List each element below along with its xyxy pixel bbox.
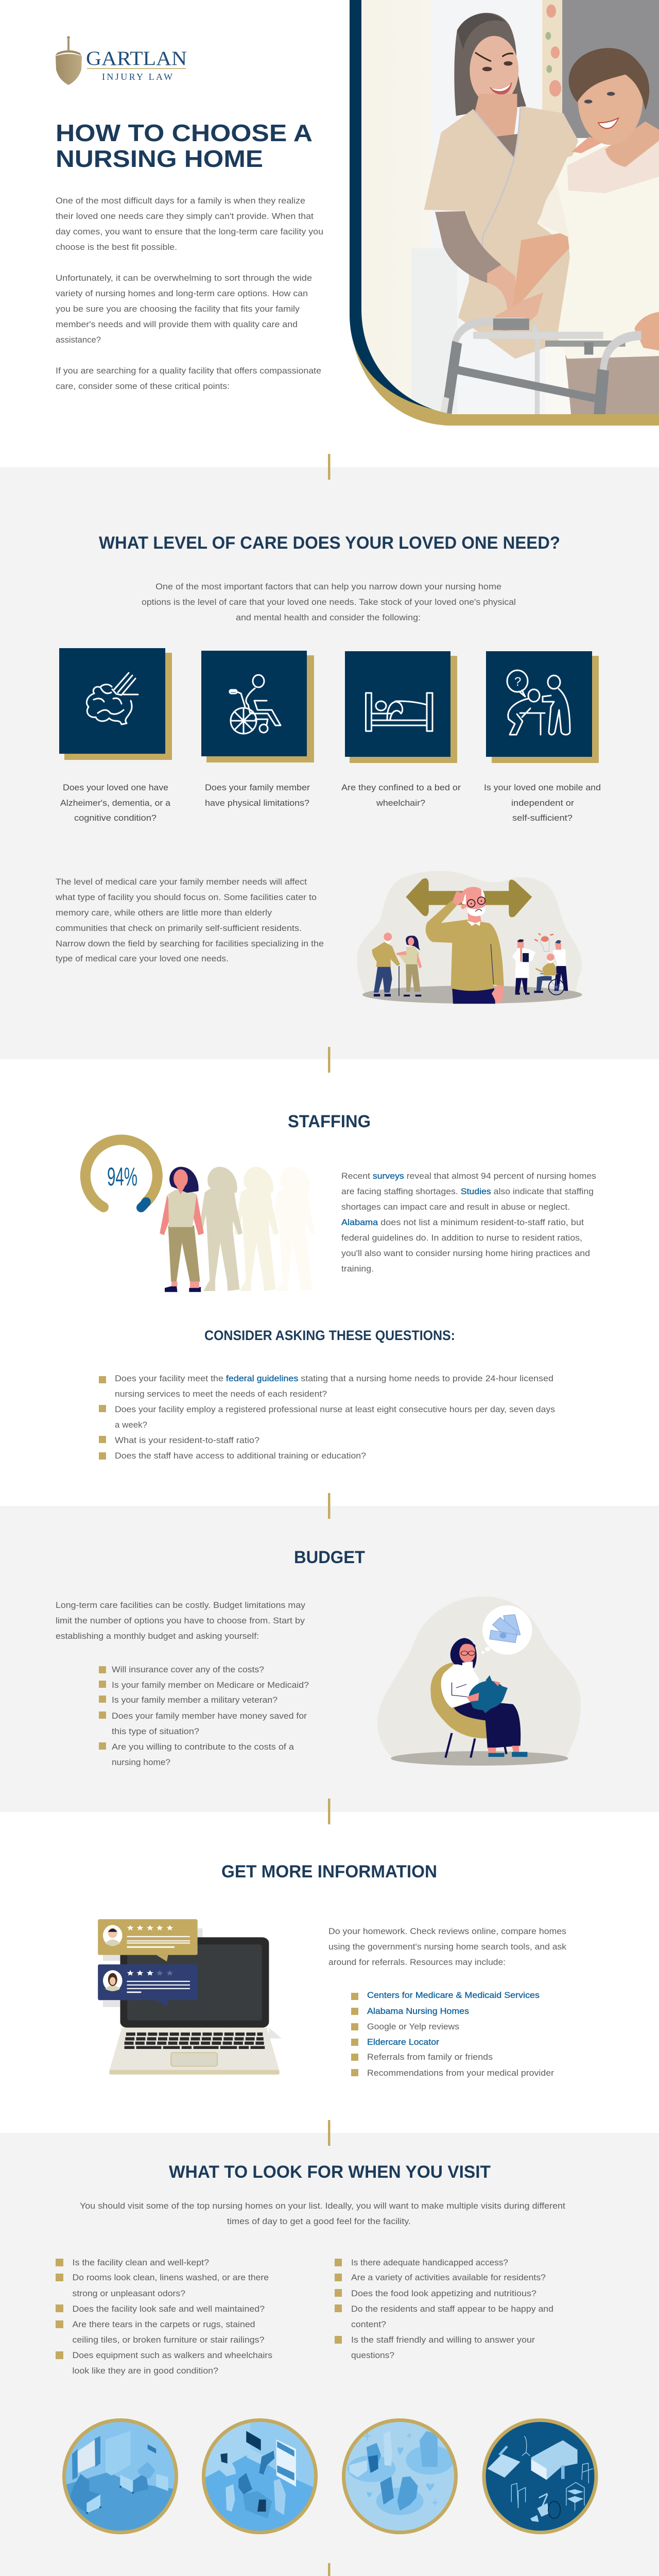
panel: hero introduction xyxy=(55,0,659,426)
walker xyxy=(455,321,525,342)
heading: get more information: GET MORE INFORMATION xyxy=(221,1862,437,1882)
icon card: bed xyxy=(345,651,457,763)
text: care questions: self-sufficient? xyxy=(512,813,573,823)
text: level of care intro: One of the most important factors that can help you narrow down your nursing home xyxy=(155,582,501,591)
list: visit checklist right: content? xyxy=(351,2320,386,2329)
text: care questions xyxy=(60,783,601,823)
list: budget questions: Does your family member have money saved for xyxy=(112,1711,307,1721)
list: visit checklist left xyxy=(56,2258,272,2376)
list: visit checklist left: Does the facility look safe and well maintained? xyxy=(72,2304,265,2314)
text: care questions: have physical limitations? xyxy=(205,798,309,808)
list: resources: Recommendations from your medical provider xyxy=(367,2069,554,2078)
doctor and patient xyxy=(517,939,524,948)
text: care questions: Is your loved one mobile and xyxy=(484,783,601,792)
list: visit checklist left: strong or unpleasant odors? xyxy=(72,2289,185,2298)
text: staffing paragraph: you'll also want to consider nursing home hiring practices and xyxy=(341,1249,590,1258)
list: resources xyxy=(351,1991,554,2078)
heading: what level of care: WHAT LEVEL OF CARE DOES YOUR LOVED ONE NEED? xyxy=(99,533,560,553)
list: staffing questions: nursing services to meet the needs of each resident? xyxy=(115,1389,327,1399)
small couple xyxy=(374,967,392,993)
list: visit checklist right: Is there adequate handicapped access? xyxy=(351,2258,508,2267)
panel: budget xyxy=(0,1493,659,1812)
text: care questions: Does your family member xyxy=(205,783,310,792)
text: visit intro xyxy=(80,2201,565,2226)
text: intro paragraphs: Unfortunately, it can be overwhelming to sort through the wide xyxy=(56,274,312,283)
list: visit checklist right: Is the staff friendly and willing to answer your xyxy=(351,2335,535,2345)
text: intro paragraphs: day comes, you want to ensure that the long-term care facility you xyxy=(56,227,323,236)
text: intro paragraphs: choose is the best fit possible. xyxy=(56,243,177,252)
text: care questions: Does your loved one have xyxy=(63,783,168,792)
panel: what to look for when you visit xyxy=(0,2120,659,2576)
text: level of medical care: communities that check on primarily self-sufficient residents. xyxy=(56,924,302,933)
list: visit checklist right: Are a variety of activities available for residents? xyxy=(351,2273,546,2282)
list: budget questions: nursing home? xyxy=(112,1758,170,1767)
logo: Gartlan Injury Law: INJURY LAW xyxy=(102,72,172,82)
list: budget questions: Are you willing to contribute to the costs of a xyxy=(112,1742,294,1752)
text: staffing paragraph: training. xyxy=(341,1264,374,1274)
text: care questions: Alzheimer's, dementia, or a xyxy=(60,798,171,808)
list: visit checklist left: ceiling tiles, or broken furniture or stair railings? xyxy=(72,2335,265,2345)
text: level of medical care xyxy=(55,877,324,963)
text: homework paragraph: around for referrals. Resources may include: xyxy=(328,1958,506,1967)
list: visit checklist left: Is the facility clean and well-kept? xyxy=(72,2258,209,2267)
text: intro paragraphs: variety of nursing homes and long-term care options. How can xyxy=(56,289,308,298)
logo: Gartlan Injury Law: GARTLAN xyxy=(86,47,187,70)
nurse xyxy=(454,13,526,116)
text: homework paragraph: using the government's nursing home search tools, and ask xyxy=(328,1942,567,1952)
list: visit checklist right: Do the residents and staff appear to be happy and xyxy=(351,2304,553,2314)
list: staffing questions: Does your facility employ a registered professional nurse at least eight consecutive hours per day, seven days xyxy=(115,1405,555,1414)
list: budget questions: Is your family member a military veteran? xyxy=(112,1696,278,1705)
list: resources: Centers for Medicare & Medicaid Services xyxy=(367,1991,540,2000)
illustration: staff shortage figures xyxy=(160,1167,315,1292)
list: visit checklist left: look like they are in good condition? xyxy=(72,2366,218,2376)
heading: budget: BUDGET xyxy=(294,1548,365,1567)
icon card: wheelchair xyxy=(201,651,314,762)
big man xyxy=(452,988,495,1004)
hero frame: gold and navy curve xyxy=(350,0,659,426)
illustration: confused elderly man with arrows xyxy=(357,871,582,1004)
text: care questions: wheelchair? xyxy=(376,798,425,808)
text: homework paragraph xyxy=(328,1927,567,1967)
text: intro paragraphs: If you are searching for a quality facility that offers compassionate xyxy=(56,366,321,376)
text: staffing paragraph: shortages can impact care and result in abuse or neglect. xyxy=(341,1202,570,1212)
text: level of medical care: The level of medical care your family member needs will affect xyxy=(56,877,307,887)
illustration: common room xyxy=(201,2416,319,2537)
photo: nurse helping elderly woman with walker xyxy=(361,0,659,417)
text: intro paragraphs xyxy=(56,196,323,391)
list: resources: Google or Yelp reviews xyxy=(367,2022,459,2031)
list: resources: Eldercare Locator xyxy=(367,2038,440,2047)
illustration: laptop with reviews xyxy=(98,1919,282,2075)
illustration: caregivers and residents xyxy=(340,2416,461,2537)
list: budget questions: Will insurance cover any of the costs? xyxy=(112,1665,264,1674)
text: staffing paragraph: federal guidelines do. In addition to nurse to resident ratios, xyxy=(341,1233,582,1243)
text: intro paragraphs: member's needs and will provide them with quality care and xyxy=(56,320,298,329)
text: level of medical care: type of medical care your loved one needs. xyxy=(56,954,229,963)
text: intro paragraphs: their loved one needs care they simply can't provide. When that xyxy=(56,212,314,221)
text: homework paragraph: Do your homework. Check reviews online, compare homes xyxy=(328,1927,566,1936)
icon card: person with question xyxy=(486,651,599,763)
list: staffing questions xyxy=(99,1374,555,1461)
chart: 94 percent ring xyxy=(85,1140,158,1208)
text: level of care intro: and mental health and consider the following: xyxy=(236,613,421,622)
heading: how to choose a nursing home: HOW TO CHOOSE A xyxy=(56,120,313,146)
illustration: woman with piggy bank xyxy=(377,1597,581,1766)
text: budget paragraph xyxy=(56,1601,306,1641)
list: resources: Alabama Nursing Homes xyxy=(367,2007,469,2016)
list: visit checklist right: Does the food look appetizing and nutritious? xyxy=(351,2289,536,2298)
list: visit checklist right xyxy=(335,2258,553,2360)
text: budget paragraph: Long-term care facilities can be costly. Budget limitations may xyxy=(56,1601,306,1610)
illustration: resident room xyxy=(62,2416,180,2537)
list: staffing questions: What is your resident-to-staff ratio? xyxy=(115,1436,259,1445)
list: visit checklist left: Do rooms look clean, linens washed, or are there xyxy=(72,2273,269,2282)
text: staffing paragraph: Alabama does not list a minimum resident-to-staff ratio, but xyxy=(341,1218,584,1227)
text: visit intro: You should visit some of the top nursing homes on your list. Ideally, you will want to make multiple visits during different xyxy=(80,2201,565,2211)
heading: staffing: STAFFING xyxy=(288,1112,371,1131)
text: staffing paragraph: are facing staffing shortages. Studies also indicate that staffing xyxy=(341,1187,594,1196)
text: staffing paragraph: Recent surveys reveal that almost 94 percent of nursing homes xyxy=(341,1172,596,1181)
text: budget paragraph: limit the number of options you have to choose from. Start by xyxy=(56,1616,305,1625)
panel: staffing xyxy=(85,1047,596,1461)
logo: Gartlan Injury Law xyxy=(56,36,187,85)
illustration: mobility equipment xyxy=(482,2418,598,2534)
text: intro paragraphs: care, consider some of these critical points: xyxy=(56,382,230,391)
list: budget questions xyxy=(99,1665,309,1767)
text: level of medical care: Narrow down the field by searching for facilities specializing in the xyxy=(56,939,324,948)
text: care questions: independent or xyxy=(511,798,574,808)
icon card: person with question: ? xyxy=(514,675,521,689)
text: care questions: cognitive condition? xyxy=(74,813,157,823)
list: staffing questions: Does the staff have access to additional training or education? xyxy=(115,1451,366,1461)
text: level of medical care: memory care, while others are little more than elderly xyxy=(56,908,272,918)
heading: consider asking these questions: CONSIDER ASKING THESE QUESTIONS: xyxy=(204,1328,455,1343)
text: level of medical care: what type of facility you should focus on. Some facilities cater to xyxy=(55,893,317,902)
list: budget questions: this type of situation? xyxy=(112,1727,199,1736)
text: budget paragraph: establishing a monthly budget and asking yourself: xyxy=(56,1632,259,1641)
list: visit checklist left: Does equipment such as walkers and wheelchairs xyxy=(72,2351,272,2360)
text: intro paragraphs: you be sure you are choosing the facility that fits your family xyxy=(56,304,300,314)
icon card: brain xyxy=(59,648,172,760)
chart: 94 percent ring: 94% xyxy=(107,1162,137,1191)
text: visit intro: times of day to get a good feel for the facility. xyxy=(227,2217,411,2226)
heading: how to choose a nursing home xyxy=(56,120,313,172)
heading: what to look for: WHAT TO LOOK FOR WHEN YOU VISIT xyxy=(169,2162,491,2182)
list: budget questions: Is your family member on Medicare or Medicaid? xyxy=(112,1681,309,1690)
elderly woman xyxy=(565,353,659,417)
panel: what level of care xyxy=(0,454,659,1059)
heading: how to choose a nursing home: NURSING HOME xyxy=(56,145,263,172)
list: staffing questions: a week? xyxy=(115,1420,147,1430)
list: visit checklist right: questions? xyxy=(351,2351,394,2360)
list: resources: Referrals from family or friends xyxy=(367,2053,493,2062)
text: care questions: Are they confined to a bed or xyxy=(341,783,461,792)
list: visit checklist left: Are there tears in the carpets or rugs, stained xyxy=(72,2320,255,2329)
text: level of care intro: options is the level of care that your loved one needs. Take stock of your loved one's physical xyxy=(142,598,516,607)
list: staffing questions: Does your facility meet the federal guidelines stating that a nursing home needs to provide 24-hour licensed xyxy=(115,1374,553,1383)
text: staffing paragraph xyxy=(341,1172,596,1274)
panel: get more information xyxy=(98,1799,567,2078)
text: intro paragraphs: assistance? xyxy=(56,335,101,345)
text: level of care intro xyxy=(142,582,516,622)
text: intro paragraphs: One of the most difficult days for a family is when they realize xyxy=(56,196,305,206)
